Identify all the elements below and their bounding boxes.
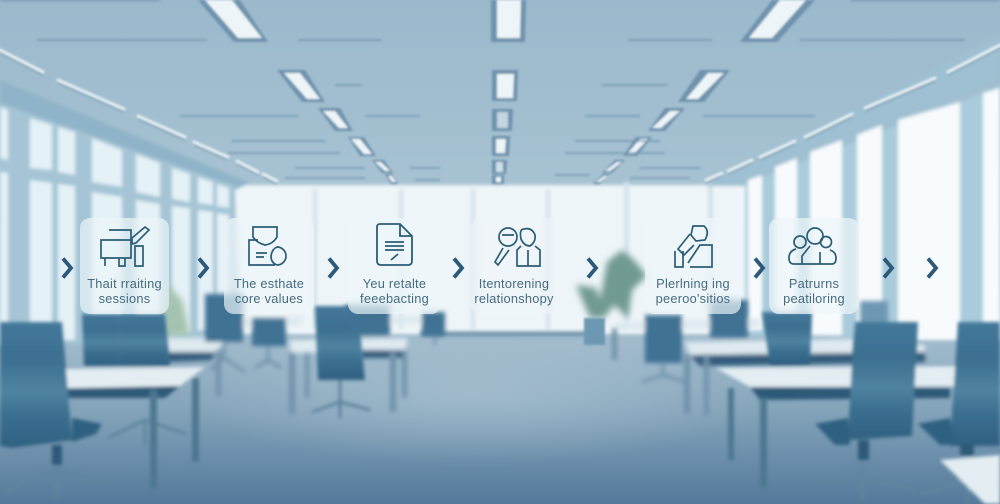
icon: hand and box [674,225,713,268]
icon: desk and computer [100,226,150,267]
arrow 4 [454,258,462,278]
label: peeroo'sitios [656,291,730,306]
label: core values [235,291,303,306]
icon: magnifier and person [494,227,541,267]
label: peatiloring [783,291,845,306]
arrow 2 [199,258,207,278]
label: Patrurns [789,276,839,290]
label [474,276,554,306]
label: The esthate [234,276,304,290]
near desks and chairs [0,306,1000,504]
label: Yeu retalte [363,276,426,290]
arrow 5 [588,258,596,278]
far desks and chairs [165,294,925,416]
arrow 6 [755,258,763,278]
right wall [705,35,1000,186]
label [87,276,162,306]
arrow 8 [928,258,936,278]
label [360,276,429,306]
label: Itentorening [479,276,549,290]
label [783,276,845,306]
label: Plerlning ing [656,276,730,290]
arrow 7 [884,258,892,278]
panel: card 4 [470,218,558,314]
label [234,276,304,306]
panel: card 6 [769,218,859,314]
label: Thait rraiting [87,276,162,290]
ceiling lights [0,0,1000,184]
icon: document [376,223,413,266]
panel: card 1 [80,218,169,314]
windows [0,35,1000,345]
arrow 1 [63,258,71,278]
panel: card 5 [645,218,741,314]
label: feeebacting [360,291,429,306]
left wall [0,80,250,190]
panel: card 2 [224,218,314,314]
panel: card 3 [348,218,441,314]
icon: person and badge [248,226,287,266]
label: sessions [99,291,150,306]
icon: group of people [788,227,837,265]
label: relationshopy [474,291,554,306]
arrow 3 [329,258,337,278]
label [656,276,730,306]
plants [164,250,647,336]
